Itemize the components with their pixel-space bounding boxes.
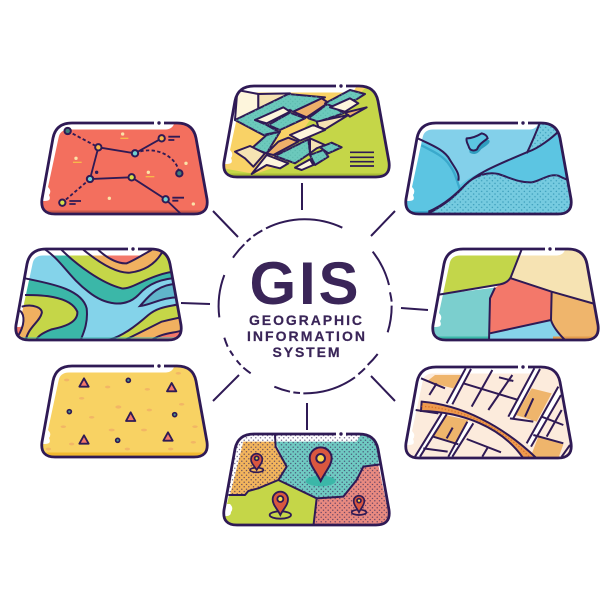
panel: street map (bottom right) <box>403 364 575 462</box>
subtitle: Geographic Information System: SYSTEM <box>272 344 340 360</box>
panel: aerial parcels map (top) <box>221 83 393 181</box>
panel: network nodes map (top left) <box>39 120 211 218</box>
icon: green zone pin <box>270 492 291 519</box>
icon: large map pin <box>306 447 336 486</box>
panel: land parcels map (right) <box>428 246 603 344</box>
subtitle: Geographic Information System: INFORMATION <box>247 328 365 344</box>
connector spokes <box>181 183 428 430</box>
panel: contour map (left) <box>12 246 185 344</box>
panel: point features map (bottom left) <box>39 363 211 461</box>
title: GIS: GIS <box>250 250 358 317</box>
subtitle: Geographic Information System: GEOGRAPHIC <box>249 312 362 328</box>
panel: water and coastline map (top right) <box>403 120 575 218</box>
panel: location pins map (bottom) <box>221 431 393 529</box>
dashed ring around title <box>219 219 392 393</box>
icon: pink zone pin <box>352 496 366 515</box>
icon: orange zone pin <box>250 454 263 472</box>
subtitle: Geographic Information System <box>247 312 365 360</box>
